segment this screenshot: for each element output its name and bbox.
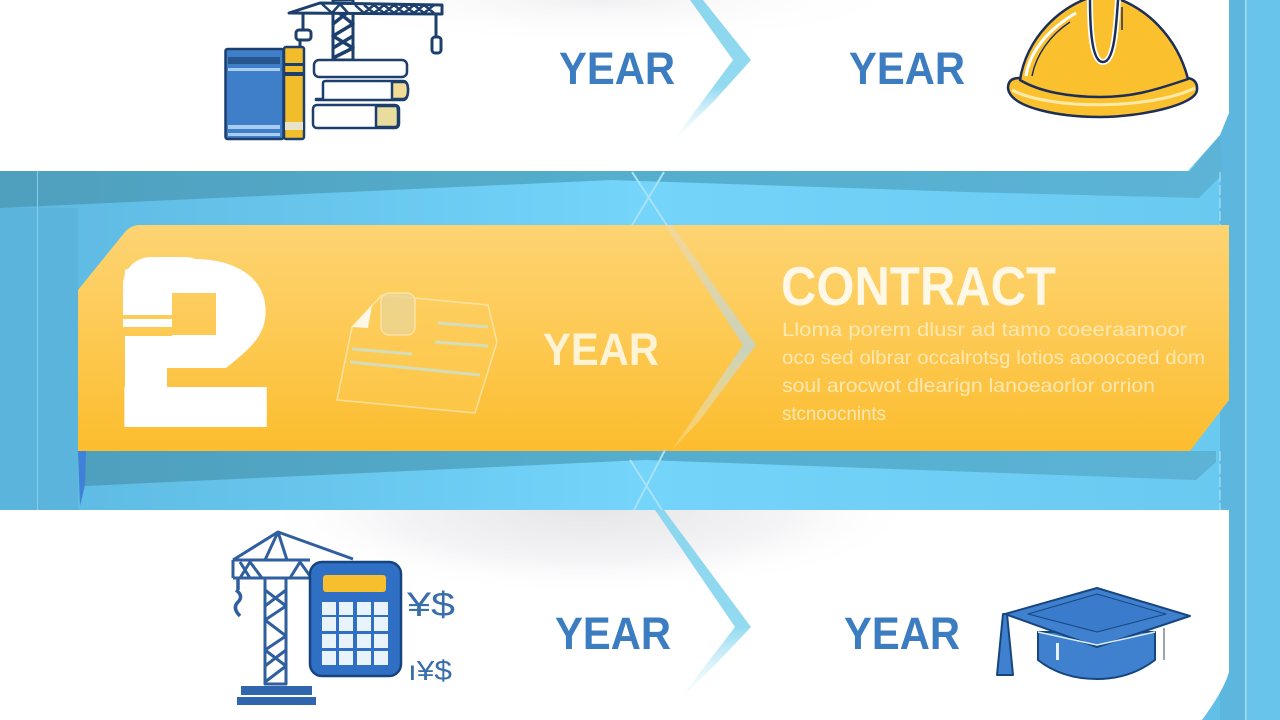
label: bottom year left: YEAR [555, 608, 671, 659]
yellow spine [284, 47, 304, 139]
icon: crane and calculator [233, 532, 455, 705]
arrow: top chevron [670, 0, 751, 145]
icon: hard hat [1008, 0, 1197, 117]
currency marks [406, 586, 455, 686]
currency marks: ¥$ [406, 586, 455, 624]
label: yellow year: YEAR [543, 324, 659, 375]
panel: top white row [0, 0, 1229, 171]
currency marks: ı¥$ [408, 655, 452, 686]
text block: contract body: Lloma porem dlusr ad tamo coeeraamoor [782, 320, 1188, 341]
crane [233, 532, 353, 705]
icon: crane and books [226, 0, 442, 139]
icon: graduation cap [997, 588, 1190, 679]
label: bottom year right: YEAR [844, 608, 960, 659]
icon: contract document [337, 293, 497, 413]
crane mast and jib [289, 0, 442, 60]
heading: contract: CONTRACT [781, 255, 1056, 317]
label: top year left: YEAR [559, 43, 675, 94]
arrow: yellow chevron [665, 225, 756, 450]
stacked books [313, 60, 408, 128]
arrow: bottom chevron [655, 510, 751, 705]
calculator [310, 562, 401, 676]
label: top year right: YEAR [849, 43, 965, 94]
blue book [226, 49, 284, 139]
text block: contract body: stcnoocnints [782, 404, 886, 425]
text block: contract body: oco sed olbrar occalrotsg lotios aooocoed dom [782, 348, 1205, 369]
numeral two: 2 [115, 230, 278, 468]
panel: yellow contract row [78, 225, 1229, 451]
text block: contract body [782, 320, 1205, 425]
arrow: band chevron crossings [630, 172, 668, 510]
text block: contract body: soul arocwot dlearign lanoeaorlor orrion [782, 376, 1155, 397]
panel: bottom white row [0, 510, 1229, 720]
